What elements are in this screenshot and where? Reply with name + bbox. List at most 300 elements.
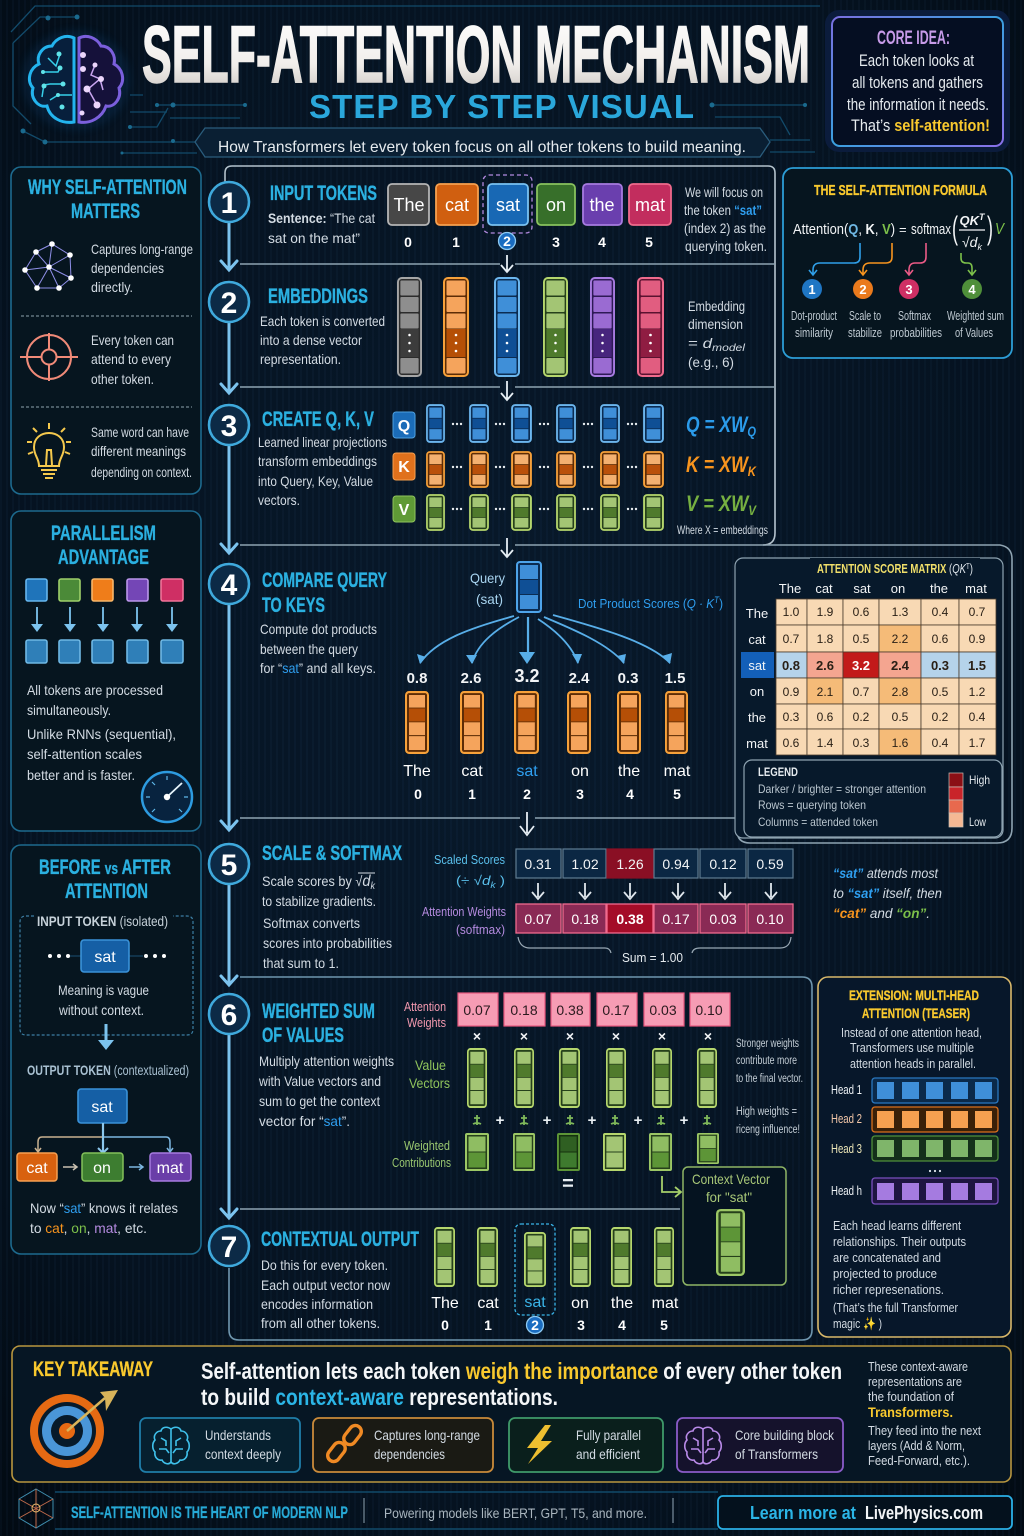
numbered markers: 4 <box>968 282 976 297</box>
chip: long-range dependencies <box>313 1418 493 1472</box>
text: linear projections <box>258 434 387 508</box>
chip: fully parallel: and efficient <box>576 1446 640 1462</box>
label: attention weights: Attention Weights <box>422 904 506 919</box>
headline: to build context-aware representations. <box>201 1384 558 1410</box>
operators: + <box>634 1112 643 1129</box>
key labels: on <box>571 763 589 780</box>
matrix heat cells: 1.0 <box>783 605 800 619</box>
scores: 3.2 <box>514 666 540 686</box>
matrix heat cells: 0.2 <box>853 710 870 724</box>
note: transformers <box>868 1360 981 1468</box>
text: dot products <box>260 621 377 676</box>
step 1: input tokens <box>268 175 767 254</box>
matrix heat cells: 1.4 <box>817 736 834 750</box>
operators: + <box>588 1112 597 1129</box>
matrix row headers: The <box>746 606 768 621</box>
panel: multi-head attention <box>818 977 1011 1337</box>
matrix heat cells: 0.5 <box>932 685 949 699</box>
multiply signs: × <box>473 1028 481 1044</box>
token: sat isolated <box>48 940 166 972</box>
matrix heat cells: 0.6 <box>853 605 870 619</box>
token row: sat <box>496 195 520 215</box>
text: each head: Each head learns different <box>833 1218 961 1233</box>
text: each head: projected to produce <box>833 1266 937 1281</box>
matrix heat cells: 1.3 <box>892 605 909 619</box>
text: parallelism: self-attention scales <box>27 746 142 762</box>
matrix heat cells: 0.5 <box>892 710 909 724</box>
matrix heat cells <box>776 599 996 755</box>
heading: before vs after <box>39 856 171 903</box>
formulas: q k v: K <box>748 463 757 479</box>
matrix row headers: the <box>748 710 766 725</box>
output labels: on <box>571 1295 589 1312</box>
formula <box>793 210 1005 252</box>
footer call to action: Learn more at <box>750 1503 856 1523</box>
key labels: mat <box>664 763 691 780</box>
text: long-range: directly. <box>91 279 133 295</box>
key labels: cat <box>461 763 483 780</box>
note: stronger weights <box>736 1038 803 1136</box>
badges: q k v: K <box>398 459 410 476</box>
label: attention weights: (softmax) <box>456 922 505 937</box>
banner: tagline <box>195 128 770 157</box>
icon: footer network <box>19 1489 53 1528</box>
arrows: query to keys <box>417 615 672 664</box>
scaled score boxes: 1.02 <box>571 856 599 872</box>
vectors: k <box>427 452 663 487</box>
token row: mat <box>635 195 665 215</box>
label: value vectors: Value <box>415 1057 446 1073</box>
label: dot product scores: T <box>714 595 720 605</box>
key vectors <box>406 692 687 753</box>
heading: compare query: TO KEYS <box>262 594 325 617</box>
note: stronger weights: Stronger weights <box>736 1038 799 1050</box>
heading: weighted sum: WEIGHTED SUM <box>262 1000 375 1023</box>
connector arrows between steps <box>501 255 534 835</box>
note: focus token <box>684 184 767 254</box>
text: every token: other token. <box>91 371 154 387</box>
matrix heat cells: 0.6 <box>783 736 800 750</box>
equals sign: = <box>562 1173 574 1195</box>
panel: parallelism advantage <box>11 511 201 831</box>
formula: softmax <box>911 221 951 238</box>
head labels: Head 3 <box>831 1141 862 1156</box>
matrix heat cells: 0.7 <box>969 605 986 619</box>
legend: High <box>969 773 990 787</box>
key labels: 4 <box>626 786 634 802</box>
note: transformers: the foundation of <box>868 1390 954 1404</box>
weight boxes: 0.07 <box>463 1002 491 1018</box>
text: embeddings: Each token is converted <box>260 313 385 329</box>
banner: tagline: How Transformers let every token focus on all other tokens to build meaning. <box>218 139 746 156</box>
attention weight boxes <box>516 904 793 933</box>
text: each head <box>833 1218 966 1331</box>
note: sat attends most: to “sat” itself, then <box>833 885 942 901</box>
label: attention weights <box>422 904 506 937</box>
panel: core idea <box>825 10 1010 152</box>
matrix heat cells: 0.3 <box>783 710 800 724</box>
note: embedding dimension: (e.g., 6) <box>688 354 734 370</box>
text: dot products: Compute dot products <box>260 621 377 637</box>
text: sentence: Sentence: “The cat <box>268 210 375 226</box>
note: focus token: querying token. <box>685 238 767 254</box>
text: parallelism: better and is faster. <box>27 767 135 783</box>
label: input token: INPUT TOKEN (isolated) <box>37 913 168 929</box>
scores: 1.5 <box>665 670 685 687</box>
matrix row headers: cat <box>748 632 766 647</box>
token indices: 4 <box>598 234 606 250</box>
matrix heat cells: 0.5 <box>853 632 870 646</box>
output labels: The <box>431 1295 459 1312</box>
output vectors <box>435 1228 673 1286</box>
label: attention weights <box>404 999 446 1030</box>
arrows: relations <box>35 1123 173 1170</box>
tokens: cat on mat <box>17 1153 191 1181</box>
panel: core idea: That’s self-attention! <box>851 116 990 135</box>
marker captions: Softmax <box>898 308 931 323</box>
text: same word: different meanings <box>91 443 186 459</box>
matrix heat cells: 0.6 <box>932 632 949 646</box>
text: 6 <box>221 999 237 1032</box>
label: weighted contributions: Weighted <box>404 1138 450 1153</box>
text: 2 <box>221 287 237 320</box>
matrix heat cells: 1.5 <box>968 658 986 673</box>
note: transformers: They feed into the next <box>868 1424 981 1438</box>
text: meaning is vague <box>58 982 149 1018</box>
matrix heat cells: 2.6 <box>816 658 834 673</box>
text: meaning is vague: without context. <box>58 1002 144 1018</box>
heading: before vs after: BEFORE vs AFTER <box>39 856 171 879</box>
matrix heat cells: 0.4 <box>932 605 949 619</box>
text: linear projections: vectors. <box>258 492 300 508</box>
token indices: 1 <box>452 234 460 250</box>
note: embedding dimension: = d <box>688 335 710 351</box>
matrix heat cells: 2.4 <box>891 658 910 673</box>
brace: sum <box>518 937 791 965</box>
scaled score boxes: 0.12 <box>709 856 737 872</box>
highlight: sat output <box>515 1224 555 1334</box>
text: long-range: Captures long-range <box>91 241 193 257</box>
scaled score boxes: 0.59 <box>756 856 784 872</box>
chip: fully parallel <box>509 1418 663 1472</box>
formula: V <box>995 221 1005 238</box>
operators: + <box>543 1112 552 1129</box>
matrix column headers: mat <box>965 581 987 596</box>
footer models: Powering models like BERT, GPT, T5, and more. <box>384 1505 647 1521</box>
matrix column headers: cat <box>815 581 833 596</box>
scaled score boxes <box>516 849 793 878</box>
label: scaled scores: k <box>490 880 496 890</box>
tokens: cat on mat: on <box>93 1160 111 1177</box>
icon: gauge <box>142 772 192 822</box>
chip: core building block: of Transformers <box>735 1446 818 1462</box>
text: each head: relationships. Their outputs <box>833 1234 966 1249</box>
text: sentence <box>268 210 375 246</box>
text: now sat knows <box>30 1200 178 1236</box>
panel: context vector <box>683 1167 786 1285</box>
marker captions: probabilities <box>890 325 942 340</box>
text: scale: k <box>370 881 376 892</box>
text: dot products: between the query <box>260 641 358 657</box>
label: value vectors <box>409 1057 450 1091</box>
scaled score boxes: 0.31 <box>524 856 552 872</box>
token indices <box>404 232 653 250</box>
key labels: sat <box>516 763 538 780</box>
heading: before vs after: ATTENTION <box>65 880 148 903</box>
matrix column headers: on <box>891 581 905 596</box>
text: linear projections: into Query, Key, Value <box>258 473 373 489</box>
icon: crosshair <box>20 333 78 381</box>
multiply signs: × <box>658 1028 666 1044</box>
text: 3 <box>221 410 237 443</box>
heading: weighted sum: OF VALUES <box>262 1024 344 1047</box>
footer slogan: SELF-ATTENTION IS THE HEART OF MODERN NLP <box>71 1503 348 1522</box>
note: transformers: representations are <box>868 1375 962 1389</box>
output labels: the <box>611 1295 633 1312</box>
headline: Self-attention lets each token weigh the importance of every other token <box>201 1358 842 1384</box>
formula: Attention(Q, K, V) <box>793 221 895 238</box>
note: focus token: We will focus on <box>685 184 763 200</box>
panel: context vector: for "sat" <box>706 1189 752 1205</box>
text: parallelism <box>27 682 176 783</box>
text: linear projections: transform embeddings <box>258 453 377 469</box>
label: value vectors: Vectors <box>409 1075 450 1091</box>
legend: Darker / brighter = stronger attention <box>758 782 926 796</box>
label: query sat: (sat) <box>476 591 503 607</box>
text: weighted sum: with Value vectors and <box>258 1073 381 1089</box>
formulas: q k v <box>686 412 757 518</box>
note: sat attends most: “cat” and “on”. <box>833 905 930 921</box>
heading: matrix <box>810 558 980 578</box>
text: scale: Scale scores by √d <box>262 873 372 890</box>
matrix heat cells: 2.2 <box>892 632 909 646</box>
note: stronger weights: to the final vector. <box>736 1073 803 1085</box>
numbered markers: 3 <box>905 282 913 297</box>
key labels: 2 <box>523 786 531 802</box>
timeline arrows <box>221 222 237 1218</box>
note: transformers: layers (Add & Norm, <box>868 1439 965 1453</box>
vectors: q <box>427 405 663 442</box>
head labels <box>831 1082 862 1198</box>
matrix column headers <box>779 581 987 596</box>
attention weight boxes: 0.03 <box>709 911 737 927</box>
token indices: 3 <box>552 234 560 250</box>
note: transformers: Transformers. <box>868 1404 953 1420</box>
key labels: 5 <box>673 786 681 802</box>
head labels: Head h <box>831 1183 862 1198</box>
heading: why: WHY SELF-ATTENTION <box>28 176 187 199</box>
matrix heat cells: 0.4 <box>932 736 949 750</box>
text: contextual output: Each output vector now <box>261 1277 391 1293</box>
icon: target <box>30 1390 118 1468</box>
legend: Low <box>969 815 986 829</box>
step 6: weighted sum of values <box>258 993 803 1197</box>
formula: k <box>977 242 982 252</box>
matrix heat cells: 0.9 <box>783 685 800 699</box>
text: every token: Every token can <box>91 332 174 348</box>
marker captions: Dot-product <box>791 308 837 323</box>
output labels: 3 <box>577 1317 585 1333</box>
chip: long-range dependencies: Captures long-range <box>374 1427 480 1443</box>
matrix heat cells: 1.6 <box>892 736 909 750</box>
heading: parallelism: ADVANTAGE <box>58 546 149 569</box>
weight boxes: 0.03 <box>649 1002 677 1018</box>
matrix heat cells: 0.9 <box>969 632 986 646</box>
label: query sat: Query <box>470 570 505 586</box>
token row: the <box>589 195 615 215</box>
text: intro: attention heads in parallel. <box>850 1056 976 1071</box>
text: parallelism: All tokens are processed <box>27 682 163 698</box>
text: long-range <box>91 241 193 295</box>
matrix heat cells: 1.2 <box>969 685 986 699</box>
token: sat contextualized: sat <box>91 1099 113 1116</box>
head labels: Head 1 <box>831 1082 862 1097</box>
token indices: 2 <box>503 233 511 249</box>
key labels: 1 <box>468 786 476 802</box>
step 3: create Q, K, V <box>258 405 768 537</box>
token: sat isolated: sat <box>94 949 116 966</box>
output labels: 2 <box>531 1317 539 1333</box>
matrix heat cells: 2.1 <box>817 685 834 699</box>
weight boxes <box>458 993 730 1026</box>
scaled score boxes: 0.94 <box>662 856 690 872</box>
formula: ) <box>987 210 993 246</box>
heading: matrix: ATTENTION SCORE MATRIX (QK <box>817 562 986 576</box>
token row: The <box>393 195 425 215</box>
text: each head: are concatenated and <box>833 1250 941 1265</box>
subtitle: STEP BY STEP VISUAL <box>309 88 694 125</box>
formulas: q k v: V <box>748 502 757 518</box>
text: weighted sum <box>258 1053 394 1129</box>
note: sat attends most: “sat” attends most <box>833 865 939 881</box>
scores: 0.8 <box>407 670 427 687</box>
label: query sat <box>470 570 505 607</box>
matrix heat cells: 1.9 <box>817 605 834 619</box>
query vector <box>517 562 541 612</box>
badges: q k v <box>393 412 415 522</box>
label: output token: OUTPUT TOKEN (contextualized) <box>27 1062 189 1078</box>
matrix column headers: sat <box>853 581 871 596</box>
token indices: 5 <box>645 234 653 250</box>
formulas: q k v: Q <box>747 423 756 439</box>
text: embeddings: into a dense vector <box>260 332 362 348</box>
matrix heat cells: 0.7 <box>853 685 870 699</box>
legend: LEGEND <box>758 765 798 779</box>
note: embedding dimension <box>688 298 746 370</box>
key labels: 3 <box>576 786 584 802</box>
weighted contribution vectors <box>466 1134 718 1170</box>
marker captions: stabilize <box>848 325 882 340</box>
text: linear projections: Learned linear projections <box>258 434 387 450</box>
matrix heat cells: 0.2 <box>932 710 949 724</box>
attention weight boxes: 0.18 <box>571 911 599 927</box>
text: 5 <box>221 849 237 882</box>
legend: Columns = attended token <box>758 815 878 829</box>
scores: 0.3 <box>618 670 638 687</box>
text: 7 <box>221 1231 237 1264</box>
arrow: before to after <box>98 1024 114 1050</box>
formula: √d <box>962 234 977 250</box>
step 4: compare query to keys <box>260 562 723 802</box>
matrix row headers: on <box>750 684 764 699</box>
output labels: cat <box>477 1295 499 1312</box>
output labels: sat <box>524 1294 546 1311</box>
matrix heat cells: 1.7 <box>969 736 986 750</box>
heading: scale softmax: SCALE & SOFTMAX <box>262 842 402 865</box>
weight boxes: 0.38 <box>556 1002 584 1018</box>
panel: why self-attention matters <box>11 167 201 494</box>
text: contextual output: encodes information <box>261 1296 373 1312</box>
token indices: 0 <box>404 234 412 250</box>
numbered markers: 1 <box>808 282 816 297</box>
label: weighted contributions: Contributions <box>392 1155 451 1170</box>
footer call to action <box>718 1496 1012 1529</box>
token: sat contextualized <box>78 1089 127 1123</box>
multiply signs: × <box>704 1028 712 1044</box>
heading: key takeaway: KEY TAKEAWAY <box>33 1358 153 1381</box>
marker captions: similarity <box>795 325 833 340</box>
output labels: 1 <box>484 1317 492 1333</box>
panel: context vector: Context Vector <box>692 1171 770 1187</box>
formula: QK <box>960 213 979 228</box>
text: long-range: dependencies <box>91 260 164 276</box>
text: contextual output: Do this for every token. <box>261 1257 388 1273</box>
scaled score boxes: 1.26 <box>616 856 644 872</box>
matrix heat cells: 2.8 <box>892 685 909 699</box>
heading: extension: EXTENSION: MULTI-HEAD <box>849 987 979 1003</box>
token row <box>388 175 671 233</box>
key labels: the <box>618 763 640 780</box>
heading: embeddings: EMBEDDINGS <box>268 285 368 308</box>
note: stronger weights: High weights = <box>736 1106 797 1118</box>
text: parallelism: simultaneously. <box>27 702 111 718</box>
arrows: scaled to weights <box>532 883 777 899</box>
text: scale: to stabilize gradients. <box>262 893 376 909</box>
text: each head: magic ✨ ) <box>833 1316 882 1331</box>
multiply signs: × <box>520 1028 528 1044</box>
text: every token <box>91 332 174 387</box>
heading: why: MATTERS <box>71 200 140 223</box>
legend <box>744 760 1002 837</box>
note: focus token: the token “sat” <box>684 202 762 218</box>
output labels <box>431 1294 679 1333</box>
output labels: mat <box>652 1295 679 1312</box>
text: scale: Softmax converts <box>263 915 360 931</box>
note: transformers: Feed-Forward, etc.). <box>868 1454 970 1468</box>
panel: attention score matrix <box>735 558 1003 838</box>
text: contextual output <box>261 1257 391 1331</box>
scores: 2.6 <box>461 670 481 687</box>
icon: brain <box>22 30 130 130</box>
note: embedding dimension: model <box>712 343 746 354</box>
weight boxes: 0.18 <box>510 1002 538 1018</box>
heading: compare query <box>262 569 387 617</box>
multiply signs: × <box>566 1028 574 1044</box>
heading: parallelism <box>51 522 156 569</box>
note: embedding dimension: dimension <box>688 316 743 332</box>
multiply signs: × <box>612 1028 620 1044</box>
chip: core building block: Core building block <box>735 1427 835 1443</box>
arrow: to context vector <box>662 1176 681 1197</box>
label: attention weights: Attention <box>404 999 446 1014</box>
matrix heat cells: 3.2 <box>852 658 870 673</box>
matrix heat cells: 0.7 <box>783 632 800 646</box>
text: each head: (That’s the full Transformer <box>833 1300 959 1315</box>
step 2: embeddings <box>260 278 746 376</box>
heading: matrix: T <box>966 562 970 571</box>
output labels: 0 <box>441 1317 449 1333</box>
heading: create q k v: CREATE Q, K, V <box>262 408 374 431</box>
